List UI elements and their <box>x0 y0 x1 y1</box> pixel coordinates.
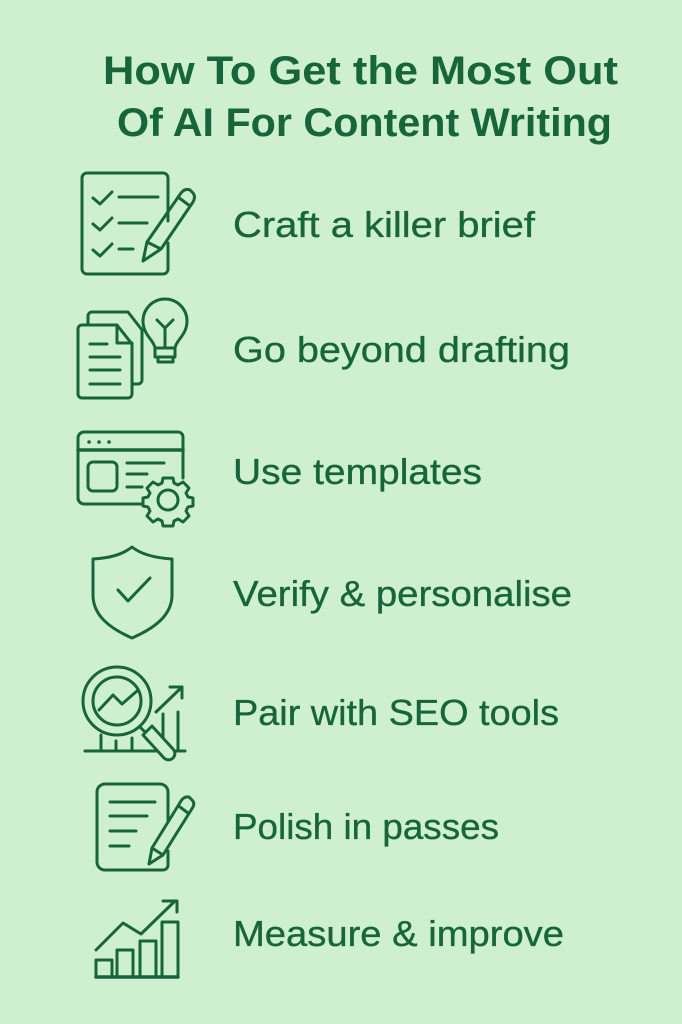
label: measure and improve: Measure & improve <box>233 913 564 954</box>
label: pair with seo tools: Pair with SEO tools <box>233 692 559 733</box>
title <box>103 49 618 145</box>
label: use templates: Use templates <box>233 451 482 492</box>
icon: documents and light bulb <box>78 299 187 398</box>
icon: rising bar chart <box>96 901 178 977</box>
label: go beyond drafting: Go beyond drafting <box>233 329 570 370</box>
icon: document and pencil <box>97 784 194 870</box>
icon: checklist and pencil <box>82 173 194 274</box>
icon: template window with gear <box>78 432 193 526</box>
icon: shield with check <box>93 547 172 638</box>
label: craft a killer brief: Craft a killer brief <box>233 204 536 245</box>
label: verify and personalise: Verify & personalise <box>233 573 572 614</box>
label: polish in passes: Polish in passes <box>233 806 499 847</box>
title: How To Get the Most Out <box>103 49 618 93</box>
icon: magnifier with chart <box>83 667 185 760</box>
title: Of AI For Content Writing <box>117 101 612 145</box>
